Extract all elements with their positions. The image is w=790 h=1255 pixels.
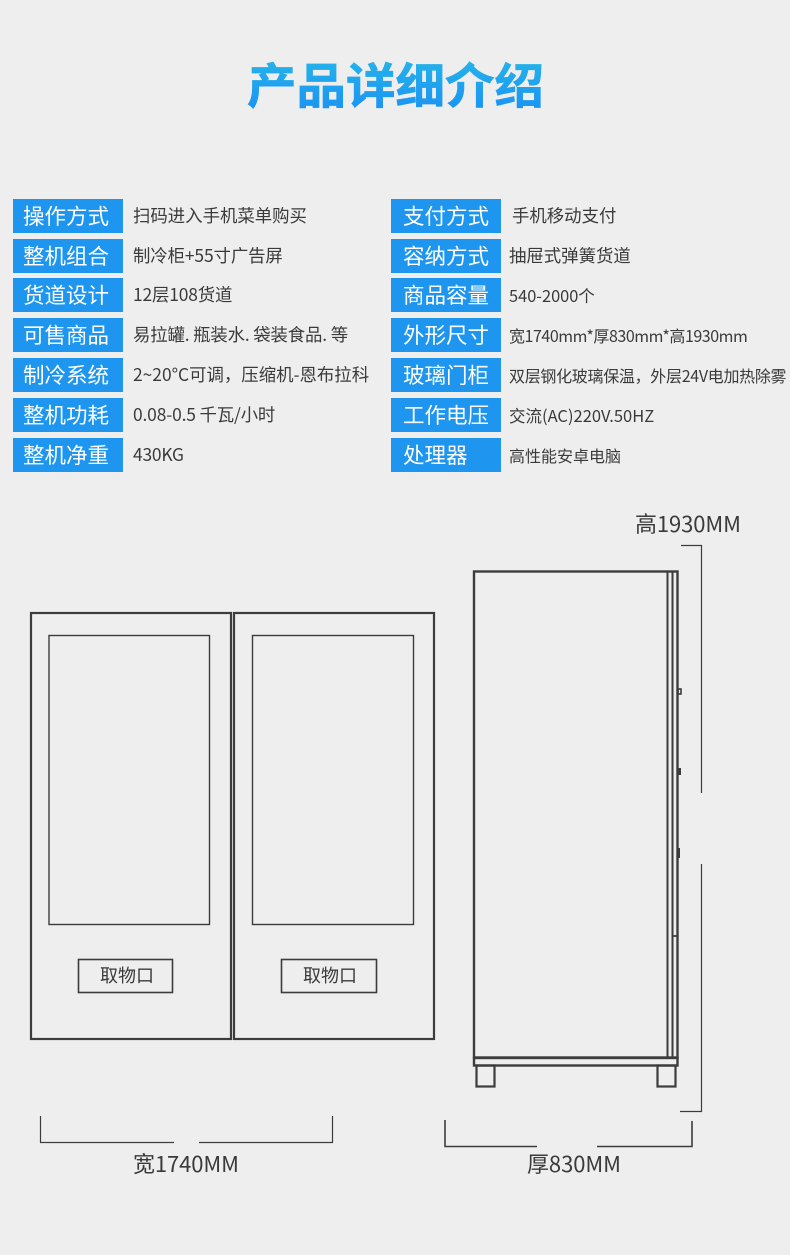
width dimension: 宽1740MM xyxy=(133,1147,239,1179)
spec table: right column xyxy=(391,199,786,472)
title: 产品详细介绍 xyxy=(247,47,544,117)
height dimension xyxy=(635,507,741,1112)
value: 制冷系统: 2~20°C可调，压缩机-恩布拉科 xyxy=(133,362,369,387)
label: 支付方式: 支付方式 xyxy=(403,200,489,231)
front view: left cabinet xyxy=(31,613,231,1039)
value: 货道设计: 12层108货道 xyxy=(133,282,232,307)
label: 整机功耗: 整机功耗 xyxy=(23,399,109,430)
label: 制冷系统: 制冷系统 xyxy=(23,359,109,390)
value: 工作电压: 交流(AC)220V.50HZ xyxy=(509,403,654,427)
label: 工作电压: 工作电压 xyxy=(403,399,489,430)
height dimension: 高1930MM xyxy=(635,507,741,539)
side view cabinet xyxy=(474,571,681,1086)
label: 玻璃门柜: 玻璃门柜 xyxy=(403,359,489,390)
depth dimension xyxy=(445,1120,692,1179)
label: 容纳方式: 容纳方式 xyxy=(403,240,489,271)
label: 处理器 xyxy=(391,438,501,472)
label: 外形尺寸: 外形尺寸 xyxy=(403,319,489,350)
value: 容纳方式: 抽屉式弹簧货道 xyxy=(509,243,631,268)
value: 商品容量: 540-2000个 xyxy=(509,283,595,307)
value: 外形尺寸: 宽1740mm*厚830mm*高1930mm xyxy=(509,323,747,347)
label: 整机净重: 整机净重 xyxy=(23,439,109,470)
depth dimension: 厚830MM xyxy=(527,1147,621,1179)
value: 整机组合: 制冷柜+55寸广告屏 xyxy=(133,243,283,268)
value: 处理器: 高性能安卓电脑 xyxy=(509,443,621,467)
front view: right cabinet: 取物口 xyxy=(303,962,357,988)
spec table: left column xyxy=(13,199,369,472)
label: 商品容量: 商品容量 xyxy=(403,279,489,310)
label: 处理器: 处理器 xyxy=(403,439,468,470)
label: 操作方式: 操作方式 xyxy=(23,200,109,231)
value: 整机净重: 430KG xyxy=(133,442,184,467)
label: 货道设计: 货道设计 xyxy=(23,279,109,310)
width dimension xyxy=(40,1116,332,1179)
value: 整机功耗: 0.08-0.5 千瓦/小时 xyxy=(133,402,275,427)
label: 整机组合: 整机组合 xyxy=(23,240,109,271)
front view: left cabinet: 取物口 xyxy=(100,962,154,988)
value: 支付方式: 手机移动支付 xyxy=(512,203,616,228)
value: 操作方式: 扫码进入手机菜单购买 xyxy=(133,203,307,228)
value: 可售商品: 易拉罐. 瓶装水. 袋装食品. 等 xyxy=(133,322,348,347)
label: 可售商品: 可售商品 xyxy=(23,319,109,350)
front view: right cabinet xyxy=(234,613,434,1039)
value: 玻璃门柜: 双层钢化玻璃保温，外层24V电加热除雾 xyxy=(509,363,786,387)
